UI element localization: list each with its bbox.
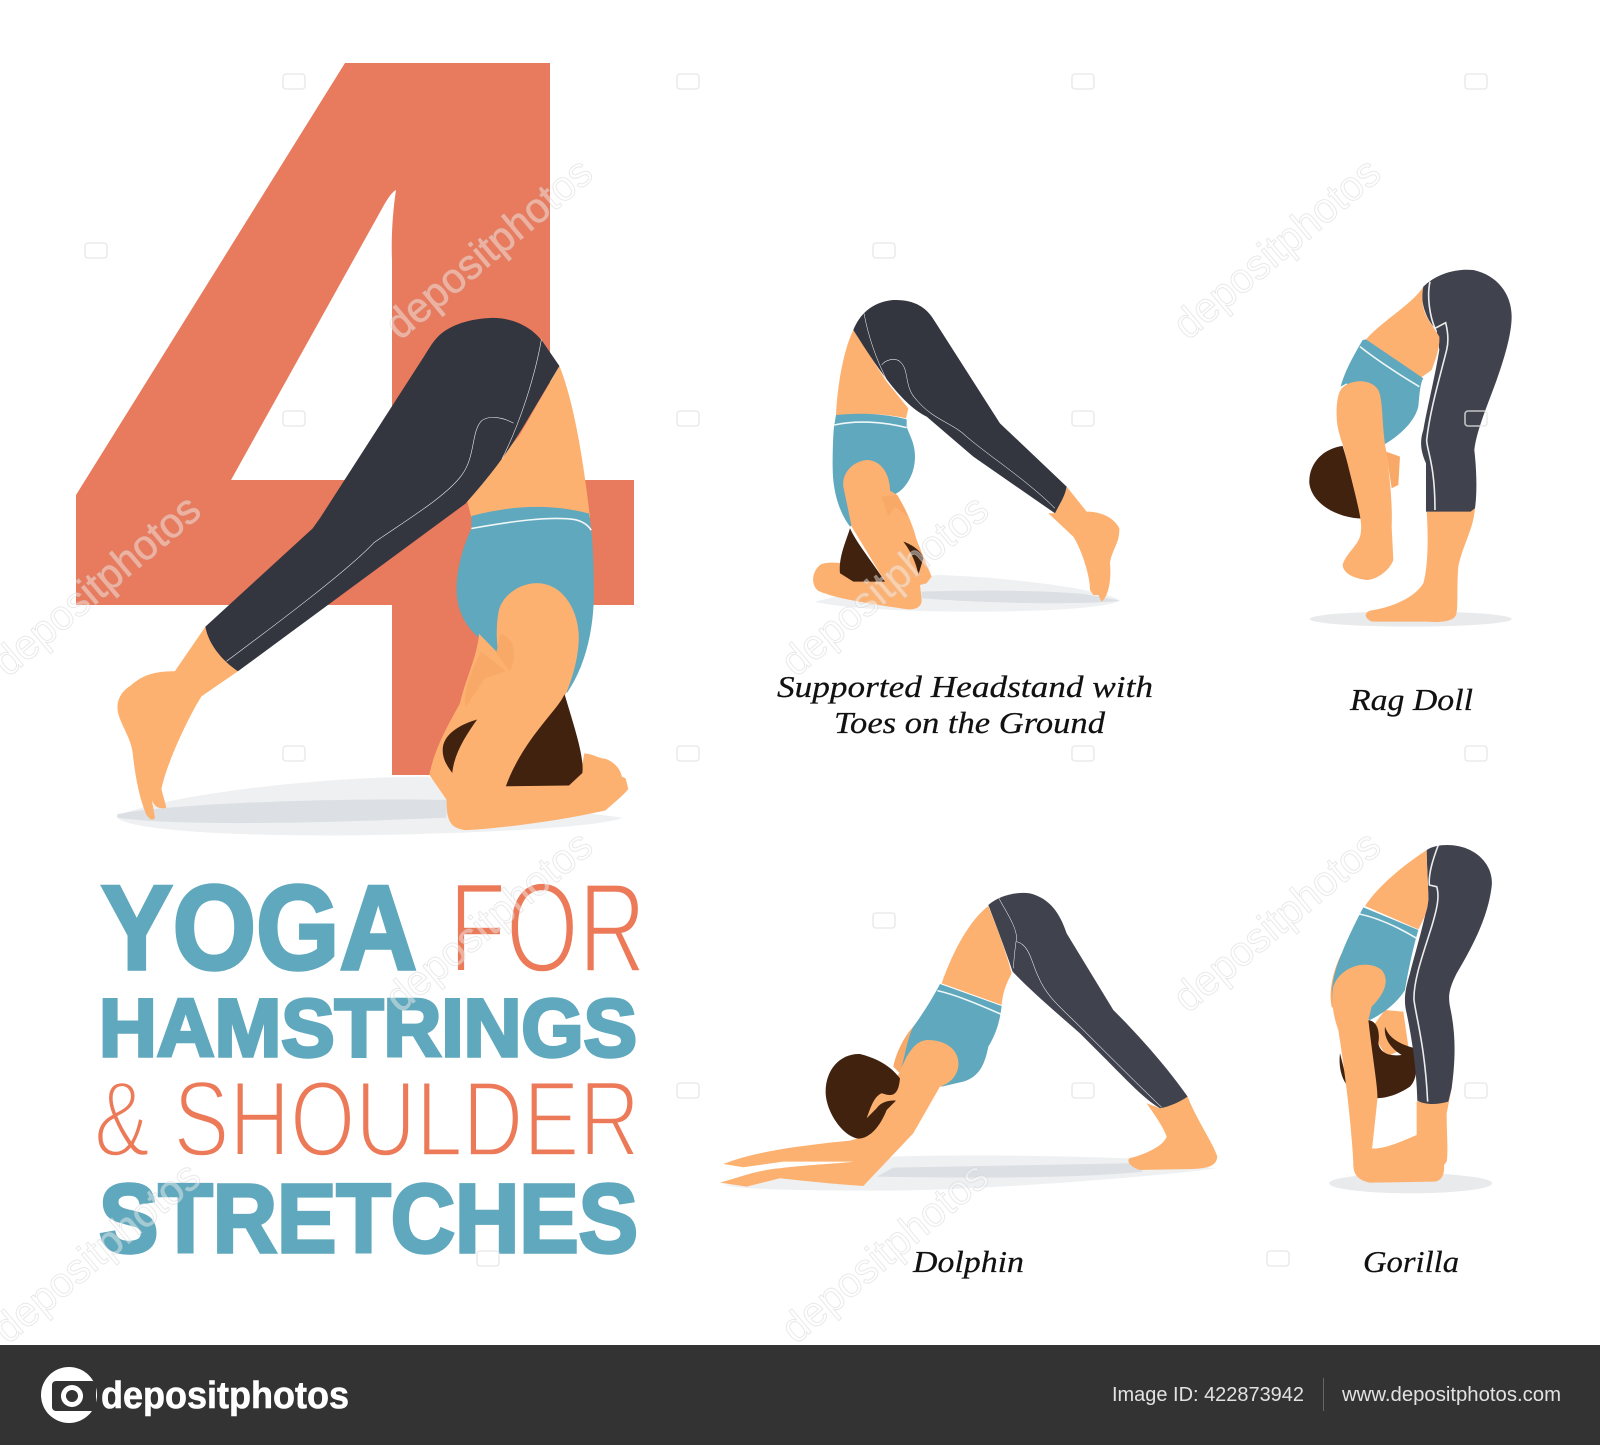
title line: & SHOULDER: & SHOULDER [94,1058,640,1179]
arm and hand [1332,965,1407,1183]
leggings seam [1414,845,1438,1102]
pose label: supported headstand: Supported Headstand with [777,669,1153,704]
leggings seam [1427,282,1448,510]
figure: dolphin [720,893,1217,1191]
head [1370,1010,1408,1057]
hair [1340,1020,1417,1098]
leggings [1405,845,1492,1104]
title word: FOR: FOR [449,857,646,1000]
sports top [1332,907,1418,1020]
leggings seams [864,313,1055,508]
arms and hands [720,1040,958,1187]
figure: rag doll [1309,270,1512,627]
ground shadow [1310,611,1512,627]
skin shading [882,495,908,517]
sports top [1341,339,1423,445]
arm, neck and forearm [813,460,932,609]
top seam [1360,347,1419,387]
title word: YOGA: YOGA [101,861,417,995]
pose label: supported headstand: Toes on the Ground [834,705,1106,740]
feet [1128,1097,1217,1170]
foot [1048,487,1119,602]
pose label: supported headstand [777,669,1153,740]
ground shadow [723,1156,1217,1191]
leggings [988,893,1188,1108]
sports top [457,507,594,693]
top seam [471,518,591,530]
title line: STRETCHES: STRETCHES [99,1164,638,1273]
ground shadow [815,575,1120,612]
leggings [853,300,1067,513]
website: www.depositphotos.com [1341,1384,1561,1406]
leggings seams [226,339,541,661]
logo wordmark: depositphotos [101,1375,349,1417]
image id: Image ID: 422873942 [1112,1384,1304,1406]
watermark: depositphotos [376,148,601,348]
main figure: supported headstand [117,318,628,836]
hand behind [1386,452,1400,488]
leggings [1421,270,1512,512]
ground shadow [117,777,623,836]
foot [117,627,238,820]
big number 4 [76,63,634,775]
hair [1309,446,1363,519]
pose label: dolphin: Dolphin [912,1244,1024,1279]
top seam [937,991,1001,1014]
hair [826,1054,900,1139]
torso [942,906,1012,1005]
hair [840,528,923,582]
top seam [1359,914,1417,938]
ground shadow [1329,1173,1492,1193]
figure: gorilla [1329,845,1492,1193]
watermark: depositphotos [1164,148,1389,348]
leggings [205,318,559,671]
watermark: depositphotos [772,1152,997,1352]
title line: HAMSTRINGS: HAMSTRINGS [99,983,637,1074]
arm, neck and forearm [429,583,628,830]
arm and hand [1337,381,1393,580]
sports top [900,984,1002,1087]
feet [1353,1088,1452,1183]
back edge [1331,953,1342,1010]
leggings seams [999,898,1162,1107]
skin shading [465,634,514,707]
watermark: depositphotos [376,821,601,1021]
torso [1365,850,1428,929]
sports top [833,414,915,527]
calves and foot [1366,508,1475,622]
pose label: rag doll: Rag Doll [1349,682,1473,717]
torso [1366,287,1439,378]
title [94,857,646,1273]
back shoulder [893,1027,917,1073]
top seam [834,422,907,428]
pose label: gorilla: Gorilla [1363,1244,1459,1279]
figure: supported headstand with toes on the ground [813,300,1120,612]
neck [860,1077,902,1138]
icon: camera logo [41,1367,97,1423]
torso [836,330,908,418]
torso [466,366,590,518]
watermark: depositphotos [1164,821,1389,1021]
footer bar [0,1345,1600,1445]
hair [443,694,583,786]
watermark: depositphotos [772,485,997,685]
